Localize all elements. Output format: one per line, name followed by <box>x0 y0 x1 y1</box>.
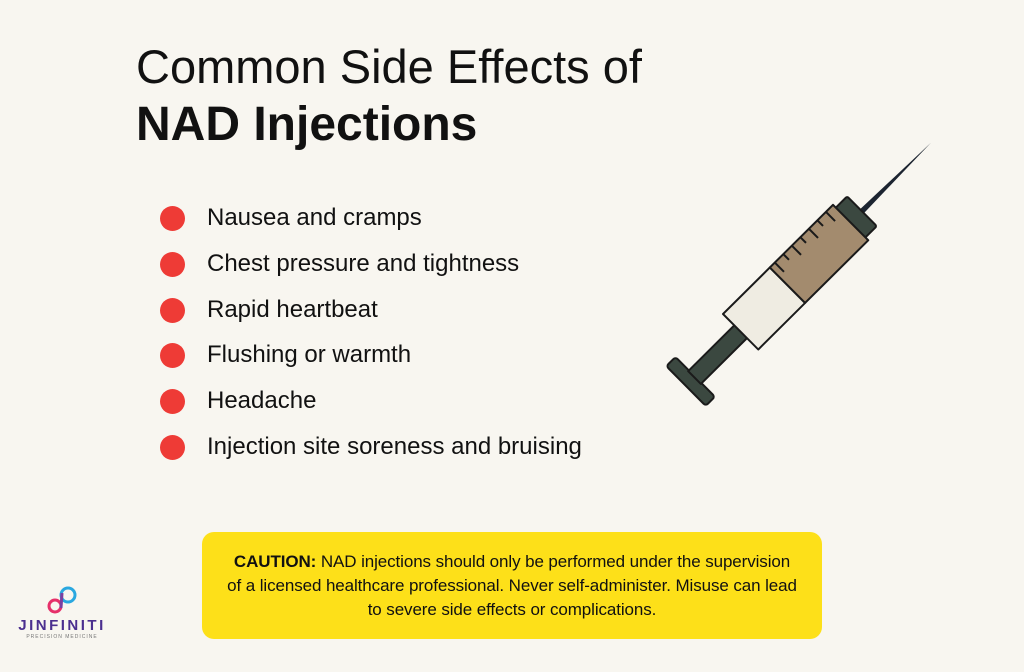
callout: caution: of a licensed healthcare professional. Never self-administer. Misuse can lead <box>227 576 797 594</box>
item 4: Flushing or warmth <box>207 341 411 368</box>
list: side effects <box>160 204 582 460</box>
item 1: Nausea and cramps <box>207 204 422 231</box>
logo: Jinfiniti: JINFINITI <box>18 617 106 634</box>
logo: Jinfiniti <box>18 586 106 640</box>
callout: caution <box>202 532 822 639</box>
callout: caution: to severe side effects or complications. <box>368 600 656 618</box>
item 5 <box>160 387 316 414</box>
item 3: Rapid heartbeat <box>207 296 378 323</box>
item 6: Injection site soreness and bruising <box>207 433 582 460</box>
title: Common Side Effects of <box>136 40 642 93</box>
title <box>136 40 642 151</box>
title: NAD Injections <box>136 98 477 151</box>
logo: Jinfiniti: PRECISION MEDICINE <box>26 634 98 640</box>
item 5: Headache <box>207 387 316 414</box>
item 2: Chest pressure and tightness <box>207 250 519 277</box>
callout: caution: CAUTION: NAD injections should only be performed under the supervision <box>234 552 790 570</box>
